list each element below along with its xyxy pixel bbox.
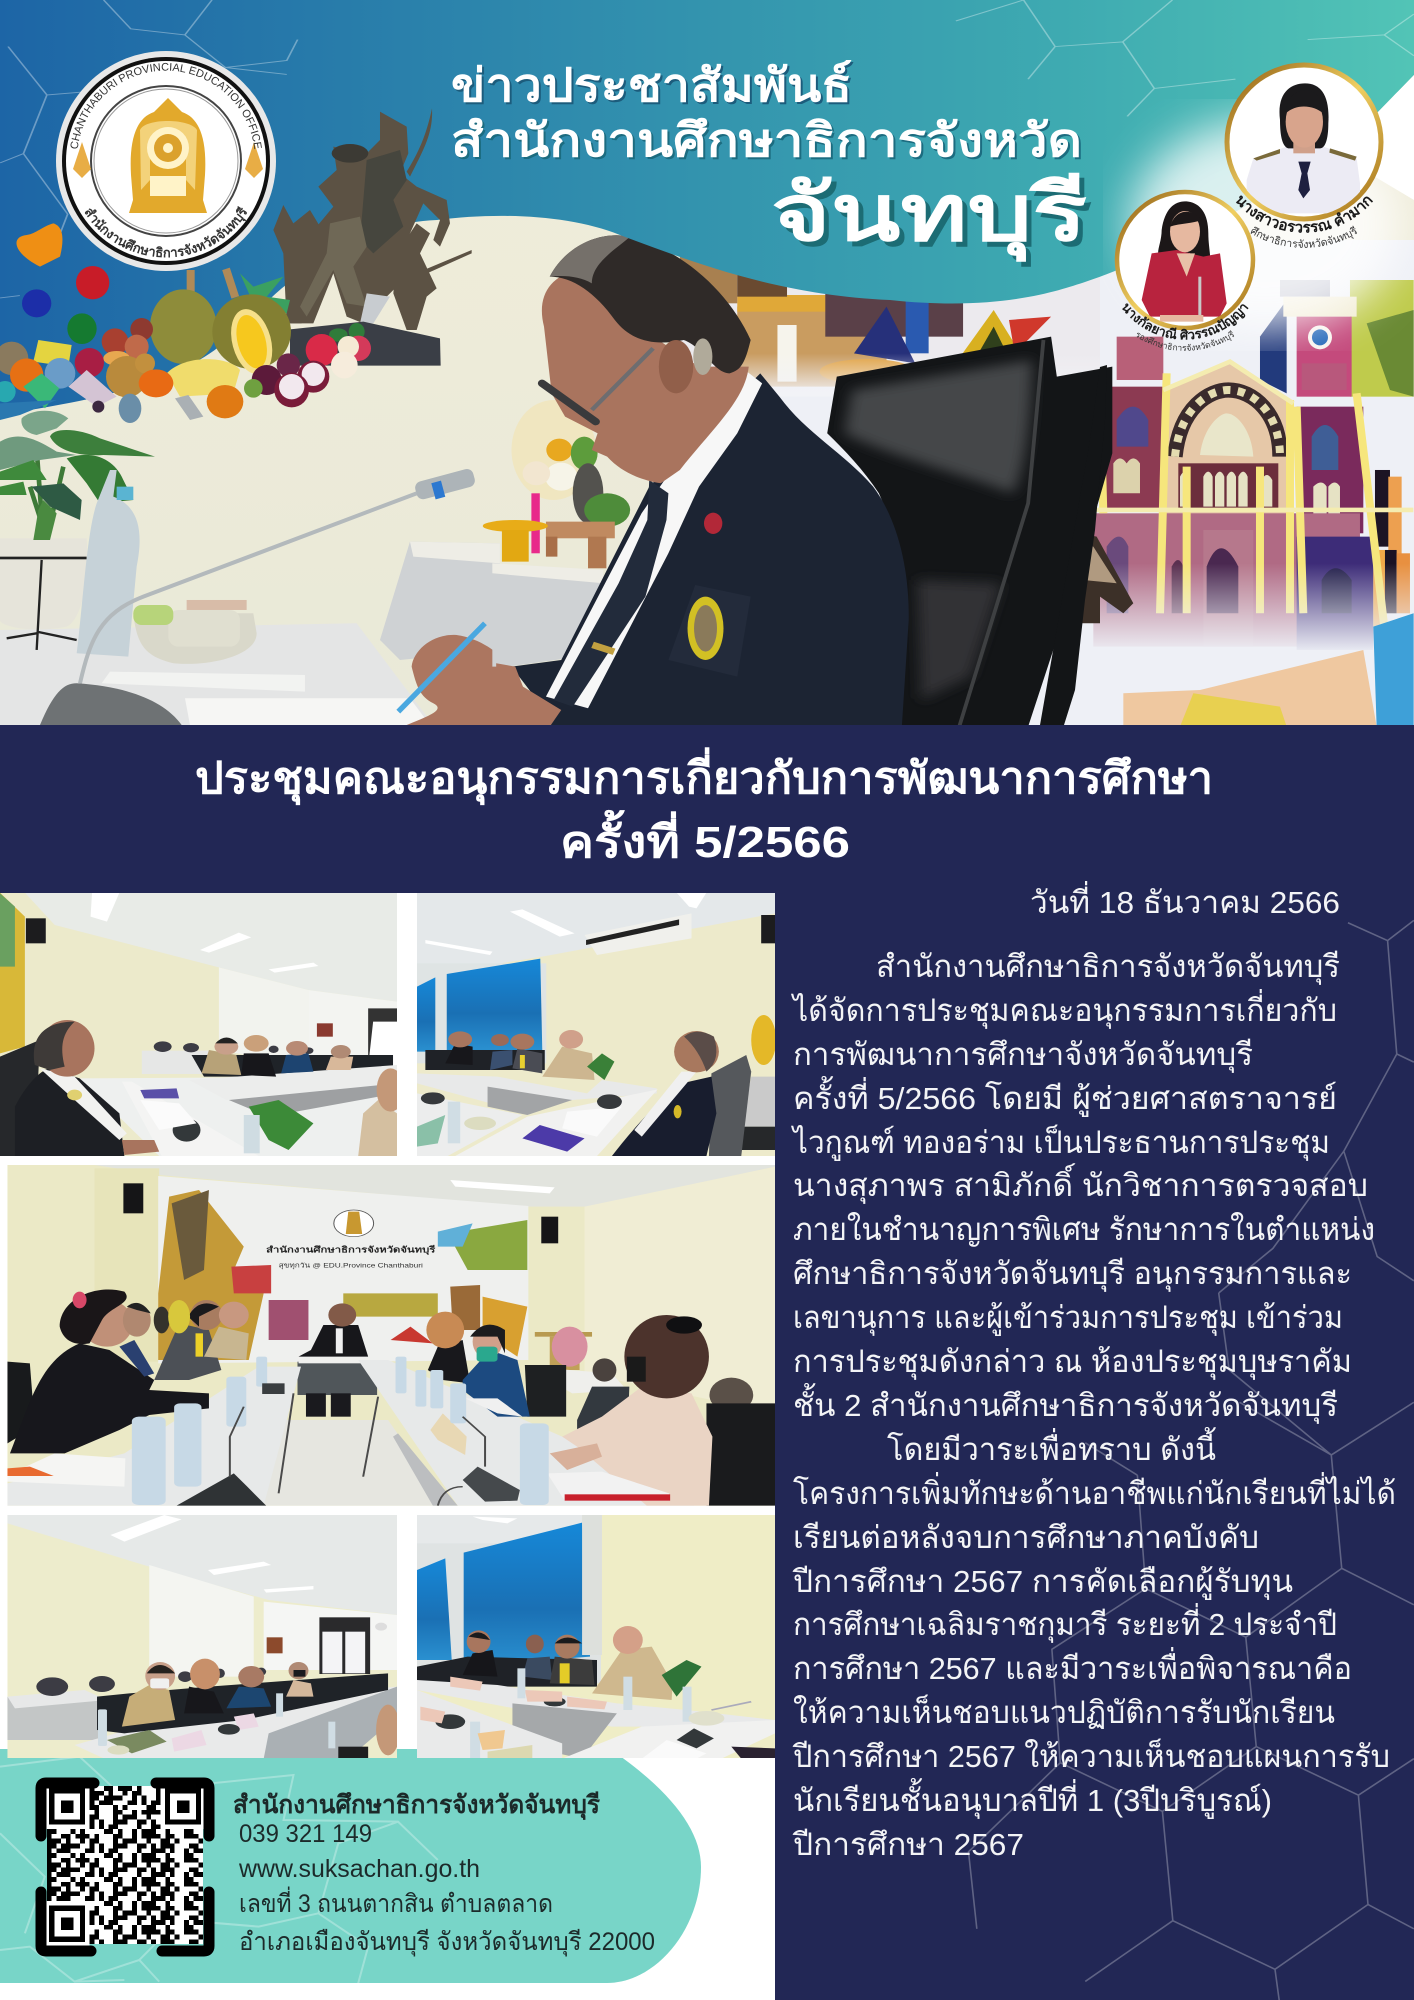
emblem xyxy=(129,98,207,213)
left table xyxy=(7,1367,301,1506)
heading: meeting title xyxy=(195,747,1213,867)
heading: news title: สำนักงานศึกษาธิการจังหวัด xyxy=(451,115,1082,166)
panel: teal contact background xyxy=(0,1749,701,1983)
top hexagon lines xyxy=(0,0,1414,298)
office chair xyxy=(827,337,1112,727)
heading: news title: ข่าวประชาสัมพันธ์ xyxy=(451,59,852,111)
fruit, gems and statue collage xyxy=(0,108,472,423)
rambutan and mangosteen xyxy=(306,334,338,366)
heading: meeting title: ครั้งที่ 5/2566 xyxy=(560,809,850,867)
right table xyxy=(358,1360,646,1506)
gems xyxy=(16,223,62,267)
photo: meeting room left view xyxy=(0,893,404,1156)
QR code xyxy=(41,1783,209,1951)
body text: ศึกษาธิการจังหวัดจันทบุรี อนุกรรมการและ xyxy=(793,1256,1352,1293)
panel: navy title and body background xyxy=(0,725,1414,2000)
name curved: นางสาวอรวรรณ คำมาก xyxy=(1236,196,1373,233)
portrait: education officer xyxy=(1224,62,1384,248)
body text: การศึกษา 2567 และมีวาระเพื่อพิจารณาคือ xyxy=(793,1647,1352,1686)
teal wave xyxy=(0,0,1414,415)
bottles and microphones xyxy=(132,1357,549,1505)
diamonds xyxy=(73,142,91,178)
body text: การพัฒนาการศึกษาจังหวัดจันทบุรี xyxy=(793,1037,1253,1074)
contact information: สำนักงานศึกษาธิการจังหวัดจันทบุรี xyxy=(233,1791,601,1821)
body text: นางสุภาพร สามิภักดิ์ นักวิชาการตรวจสอบ xyxy=(793,1162,1368,1205)
decorative navy hexagons xyxy=(968,920,1414,2000)
body text xyxy=(790,949,1396,1862)
body text: การศึกษาเฉลิมราชกุมารี ระยะที่ 2 ประจำปี xyxy=(793,1603,1337,1644)
heading: news title xyxy=(451,59,1087,262)
body text: เรียนต่อหลังจบการศึกษาภาคบังคับ xyxy=(793,1520,1259,1555)
body text: โดยมีวาระเพื่อทราบ ดังนี้ xyxy=(887,1427,1216,1467)
floor and tables xyxy=(264,1420,432,1506)
heading: meeting title: ประชุมคณะอนุกรรมการเกี่ยวกับการพัฒนาการศึกษา xyxy=(195,747,1213,806)
church mural xyxy=(1080,280,1414,730)
mural behind the man xyxy=(680,257,1051,387)
portrait: education officer: ศึกษาธิการจังหวัดจันทบุรี xyxy=(1250,226,1357,248)
durian flesh xyxy=(167,359,240,397)
panel: header banner photo xyxy=(0,0,1414,730)
body text: สำนักงานศึกษาธิการจังหวัดจันทบุรี xyxy=(876,949,1340,986)
body text: ไวกูณฑ์ ทองอร่าม เป็นประธานการประชุม xyxy=(790,1124,1330,1162)
photo: wide meeting room view: สำนักงานศึกษาธิการจังหวัดจันทบุรี xyxy=(266,1245,435,1256)
body text: ได้จัดการประชุมคณะอนุกรรมการเกี่ยวกับ xyxy=(790,989,1337,1030)
pedestal xyxy=(290,322,441,366)
white glow behind portraits xyxy=(1130,120,1400,330)
body text: ปีการศึกษา 2567 การคัดเลือกผู้รับทุน xyxy=(792,1564,1293,1601)
centre man xyxy=(298,1325,368,1357)
longans and red fruit xyxy=(102,328,128,355)
body text: ครั้งที่ 5/2566 โดยมี ผู้ช่วยศาสตราจารย์ xyxy=(793,1076,1337,1117)
body text: โครงการเพิ่มทักษะด้านอาชีพแก่นักเรียนที่ไม่ได้ xyxy=(793,1472,1396,1511)
photo: wide meeting room view: สุขทุกวัน @ EDU.Province Chanthaburi xyxy=(279,1262,423,1269)
body text: ปีการศึกษา 2567 ให้ความเห็นชอบแผนการรับ xyxy=(792,1738,1390,1774)
ring text: CHANTHABURI PROVINCIAL EDUCATION OFFICE xyxy=(70,62,262,150)
contact information xyxy=(233,1791,655,1957)
logo badge: สำนักงานศึกษาธิการจังหวัดจันทบุรี xyxy=(84,206,247,258)
body text: เลขานุการ และผู้เข้าร่วมการประชุม เข้าร่วม xyxy=(793,1300,1343,1337)
bottom-left table and meeting items xyxy=(0,411,507,725)
body text: ชั้น 2 สำนักงานศึกษาธิการจังหวัดจันทบุรี xyxy=(793,1383,1338,1425)
body text: ปีการศึกษา 2567 xyxy=(792,1827,1024,1862)
portrait: deputy officer: รองศึกษาธิการจังหวัดจันทบุรี xyxy=(1136,330,1234,351)
leaves xyxy=(240,273,290,313)
contact information: อำเภอเมืองจันทบุรี จังหวัดจันทบุรี 22000 xyxy=(239,1928,655,1957)
body text: ให้ความเห็นชอบแนวปฏิบัติการรับนักเรียน xyxy=(793,1694,1335,1730)
statue xyxy=(273,108,472,330)
logo badge xyxy=(56,51,276,271)
body text: การประชุมดังกล่าว ณ ห้องประชุมบุษราคัม xyxy=(793,1344,1352,1381)
right people xyxy=(428,1340,470,1383)
heading: news title: จันทบุรี xyxy=(771,170,1087,262)
altar flowers and gold tray xyxy=(483,400,630,667)
date: วันที่ 18 ธันวาคม 2566 xyxy=(1030,881,1340,920)
body text: นักเรียนชั้นอนุบาลปีที่ 1 (3ปีบริบูรณ์) xyxy=(793,1778,1272,1820)
contact information: เลขที่ 3 ถนนตากสิน ตำบลตลาด xyxy=(239,1886,553,1918)
seated man writing xyxy=(496,235,909,727)
portrait: deputy officer xyxy=(1114,190,1256,351)
body text: ภายในชำนาญการพิเศษ รักษาการในตำแหน่ง xyxy=(793,1212,1375,1247)
contact information: 039 321 149 xyxy=(239,1820,372,1848)
photo: meeting room right view xyxy=(417,893,776,1156)
durians xyxy=(187,270,195,293)
left people xyxy=(7,1362,35,1443)
photo: wide meeting room view xyxy=(7,1165,775,1506)
name curved: นางกัลยาณี ศิวรรณปัญญา xyxy=(1122,303,1248,340)
contact information: www.suksachan.go.th xyxy=(238,1855,480,1883)
photo: lower right meeting view xyxy=(417,1515,775,1759)
photo: lower left meeting view xyxy=(7,1515,400,1759)
